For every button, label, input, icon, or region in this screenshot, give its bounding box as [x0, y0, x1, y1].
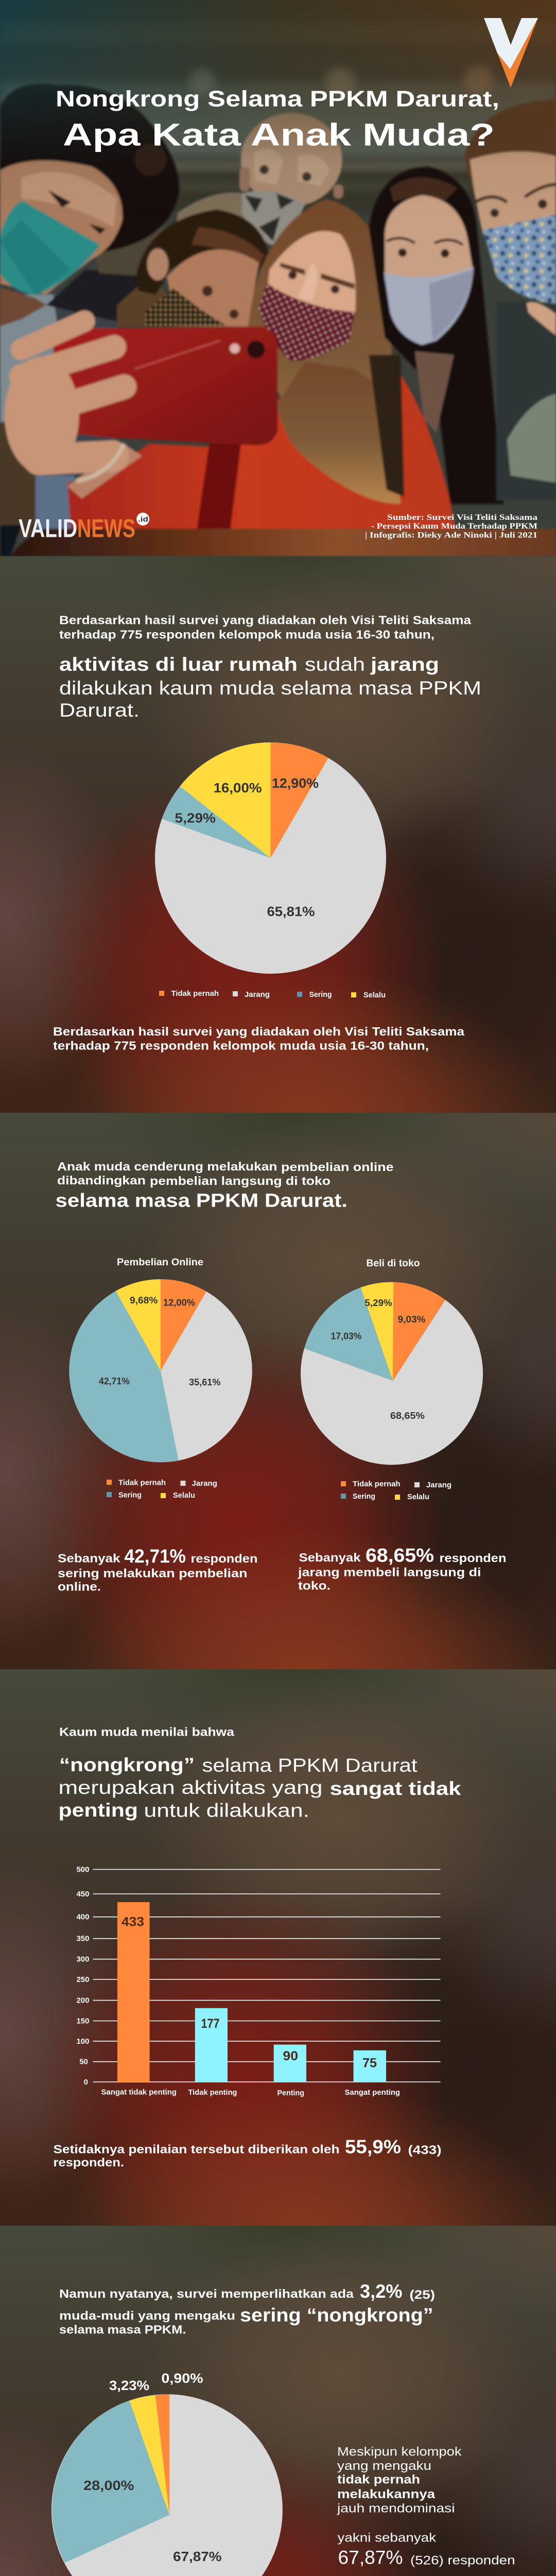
callout: never group dominates: (526) responden	[410, 2553, 515, 2568]
heading: pembelian online	[281, 1160, 393, 1174]
pie chart: hanging out frequency: 67,87%	[173, 2549, 221, 2564]
legend	[159, 990, 386, 999]
logo: Validnews.id: .id	[138, 515, 148, 523]
closing text: 55,9%	[345, 2136, 401, 2158]
closing text: Setidaknya penilaian tersebut diberikan oleh	[54, 2142, 340, 2156]
pie chart: in-store purchase: 17,03%	[331, 1331, 361, 1342]
callout: in-store purchase share: Sebanyak	[299, 1551, 361, 1564]
callout: never group dominates: jauh mendominasi	[337, 2502, 455, 2515]
heading: muda-mudi yang mengaku	[59, 2309, 235, 2323]
centre woman hair	[248, 199, 401, 497]
second woman	[117, 273, 184, 327]
heading: dibandingkan	[57, 1174, 146, 1187]
callout: online purchase share: 42,71%	[125, 1546, 186, 1567]
heading: (25)	[410, 2288, 435, 2302]
table	[11, 529, 556, 556]
bar chart: importance rating: 177	[201, 2016, 219, 2031]
pie chart: outdoor activity frequency: 5,29%	[175, 810, 216, 825]
legend: Tidak pernah	[171, 990, 219, 998]
heading: activity outside home: Darurat.	[59, 700, 140, 721]
intro text: Kaum muda menilai bahwa	[59, 1725, 235, 1738]
bar chart: importance rating: 150	[76, 2016, 90, 2026]
source credit: Sumber: Survei Visi Teliti Saksama	[387, 513, 537, 522]
logo: Validnews.id: VALID	[19, 514, 77, 543]
bar chart: importance rating: Penting	[277, 2089, 304, 2097]
title	[56, 87, 499, 152]
bar chart: importance rating: 100	[76, 2037, 90, 2046]
bar chart: importance rating: 300	[76, 1955, 90, 1964]
title: Nongkrong Selama PPKM Darurat,	[56, 87, 499, 111]
heading: untuk dilakukan.	[144, 1800, 309, 1821]
heading: selama masa PPKM.	[59, 2323, 186, 2336]
legend: Jarang	[245, 991, 270, 999]
closing text	[54, 2136, 442, 2169]
closing text: Berdasarkan hasil survei yang diadakan oleh Visi Teliti Saksama	[53, 1025, 465, 1038]
pie chart: hanging out frequency	[51, 2370, 283, 2576]
source credit: - Persepsi Kaum Muda Terhadap PPKM	[371, 522, 537, 531]
pie chart: outdoor activity frequency: 16,00%	[213, 780, 262, 795]
heading	[59, 2281, 435, 2336]
heading: sering “nongkrong”	[240, 2304, 433, 2326]
panel: frequency of hanging out	[0, 2226, 556, 2576]
legend: Sering	[309, 991, 332, 999]
pie chart: online purchase: 9,68%	[130, 1295, 158, 1306]
closing text: (433)	[408, 2143, 442, 2157]
icon: V brand logo	[484, 18, 538, 88]
bar chart: importance rating: Sangat tidak penting	[101, 2088, 177, 2097]
photo: group of friends taking a masked selfie	[0, 0, 556, 556]
callout: in-store purchase share	[298, 1545, 507, 1592]
source credit	[365, 513, 537, 540]
intro text: Berdasarkan hasil survei yang diadakan oleh Visi Teliti Saksama	[59, 613, 472, 626]
callout: online purchase share: Sebanyak	[58, 1552, 121, 1565]
callout: in-store purchase share: toko.	[298, 1579, 331, 1592]
pie chart: online purchase	[69, 1257, 252, 1462]
callout: never group dominates: 67,87%	[338, 2547, 403, 2568]
callout: never group dominates: melakukannya	[337, 2487, 436, 2501]
bar chart: importance rating: 50	[79, 2058, 88, 2066]
pie chart: in-store purchase	[301, 1258, 483, 1465]
legend: in-store purchase: Jarang	[426, 1481, 451, 1489]
bar chart: importance rating: Tidak penting	[188, 2088, 237, 2097]
pie chart: outdoor activity frequency: 65,81%	[267, 904, 315, 919]
bar chart: importance rating: 350	[76, 1934, 90, 1943]
intro text: terhadap 775 responden kelompok muda usia 16-30 tahun,	[59, 628, 435, 641]
heading: “nongkrong”	[59, 1754, 195, 1775]
heading: pembelian langsung di toko	[150, 1174, 331, 1188]
callout: in-store purchase share: 68,65%	[366, 1545, 434, 1566]
bar chart: importance rating	[76, 1865, 441, 2097]
legend: in-store purchase: Tidak pernah	[353, 1480, 401, 1488]
callout: online purchase share: sering melakukan pembelian	[58, 1566, 247, 1580]
title: Apa Kata Anak Muda?	[63, 117, 495, 152]
heading: sangat tidak	[329, 1778, 461, 1799]
logo: Validnews.id	[19, 513, 149, 543]
intro text	[59, 613, 472, 641]
legend: online purchase: Sering	[118, 1491, 142, 1499]
bar chart: importance rating: 400	[76, 1912, 90, 1922]
right woman	[369, 167, 503, 504]
heading	[59, 1754, 461, 1821]
heading: penting	[59, 1800, 138, 1821]
panel: outdoor activity survey	[0, 556, 556, 1113]
callout: never group dominates: yang mengaku	[337, 2459, 431, 2473]
legend: online purchase: Tidak pernah	[118, 1479, 166, 1487]
source credit: | Infografis: Dieky Ade Ninoki | Juli 2021	[365, 531, 537, 540]
pie chart: online purchase: 35,61%	[189, 1377, 220, 1387]
pie chart: online purchase: 12,00%	[163, 1297, 195, 1308]
panel: hero photo header	[0, 0, 556, 556]
bar chart: importance rating: 200	[76, 1996, 90, 2005]
pie chart: in-store purchase: 68,65%	[390, 1411, 425, 1421]
heading: activity outside home: dilakukan kaum muda selama masa PPKM	[59, 677, 481, 699]
left person	[0, 291, 117, 539]
closing text: responden.	[54, 2156, 124, 2169]
bar chart: importance rating: 433	[121, 1914, 144, 1929]
bar chart: importance rating: 75	[362, 2056, 377, 2070]
legend: in-store purchase	[341, 1480, 451, 1501]
callout: in-store purchase share: jarang membeli langsung di	[298, 1565, 481, 1579]
callout: never group dominates	[337, 2445, 515, 2568]
heading: activity outside home: jarang	[370, 654, 439, 675]
right man	[496, 301, 556, 500]
heading: activity outside home	[59, 654, 481, 721]
heading: activity outside home: aktivitas di luar rumah	[59, 654, 298, 675]
pie chart: hanging out frequency: 28,00%	[83, 2478, 134, 2493]
pie chart: online purchase: Pembelian Online	[117, 1257, 203, 1268]
legend: in-store purchase: Selalu	[407, 1493, 429, 1501]
callout: never group dominates: yakni sebanyak	[338, 2531, 437, 2545]
heading: activity outside home: sudah	[305, 654, 365, 675]
bar chart: importance rating: 0	[84, 2078, 88, 2087]
heading: 3,2%	[360, 2281, 403, 2302]
pie chart: online purchase: 42,71%	[99, 1376, 130, 1386]
callout: in-store purchase share: responden	[440, 1551, 507, 1565]
pie chart: in-store purchase: 9,03%	[397, 1314, 425, 1325]
heading: selama PPKM Darurat	[202, 1755, 418, 1776]
callout: online purchase share	[58, 1546, 257, 1593]
legend: online purchase: Selalu	[173, 1492, 195, 1500]
legend: online purchase	[107, 1479, 217, 1500]
bar chart: importance rating: 250	[76, 1975, 90, 1984]
callout: online purchase share: responden	[190, 1552, 257, 1565]
pie chart: hanging out frequency: 0,90%	[162, 2370, 203, 2386]
callout: online purchase share: online.	[58, 1580, 101, 1593]
bar chart: importance rating: 90	[283, 2049, 298, 2063]
closing text: terhadap 775 responden kelompok muda usia 16-30 tahun,	[53, 1039, 429, 1052]
legend: online purchase: Jarang	[192, 1480, 217, 1488]
bar chart: importance rating: 500	[76, 1865, 90, 1874]
heading: Namun nyatanya, survei memperlihatkan ada	[59, 2287, 354, 2300]
pie chart: outdoor activity frequency: 12,90%	[272, 775, 319, 791]
back person	[177, 193, 248, 248]
callout: never group dominates: Meskipun kelompok	[337, 2445, 462, 2459]
logo: Validnews.id: NEWS	[77, 514, 135, 543]
phone and hand	[53, 327, 277, 445]
callout: never group dominates: tidak pernah	[337, 2473, 420, 2486]
bar chart: importance rating: Sangat penting	[345, 2088, 400, 2097]
heading: merupakan aktivitas yang	[59, 1777, 322, 1798]
pie chart: in-store purchase: Beli di toko	[367, 1258, 420, 1269]
panel: online versus in-store shopping	[0, 1113, 556, 1669]
heading: Anak muda cenderung melakukan	[57, 1160, 277, 1173]
pie chart: in-store purchase: 5,29%	[364, 1298, 392, 1308]
closing text	[53, 1025, 465, 1052]
pie chart: outdoor activity frequency	[155, 742, 386, 974]
pie chart: hanging out frequency: 3,23%	[109, 2378, 149, 2393]
legend: in-store purchase: Sering	[353, 1493, 375, 1501]
sweater	[67, 369, 456, 529]
legend: Selalu	[363, 991, 386, 999]
top colour fade	[0, 0, 556, 165]
heading	[56, 1160, 393, 1211]
heading: selama masa PPKM Darurat.	[56, 1190, 348, 1211]
panel: importance of hanging out	[0, 1669, 556, 2226]
bar chart: importance rating: 450	[76, 1890, 90, 1899]
